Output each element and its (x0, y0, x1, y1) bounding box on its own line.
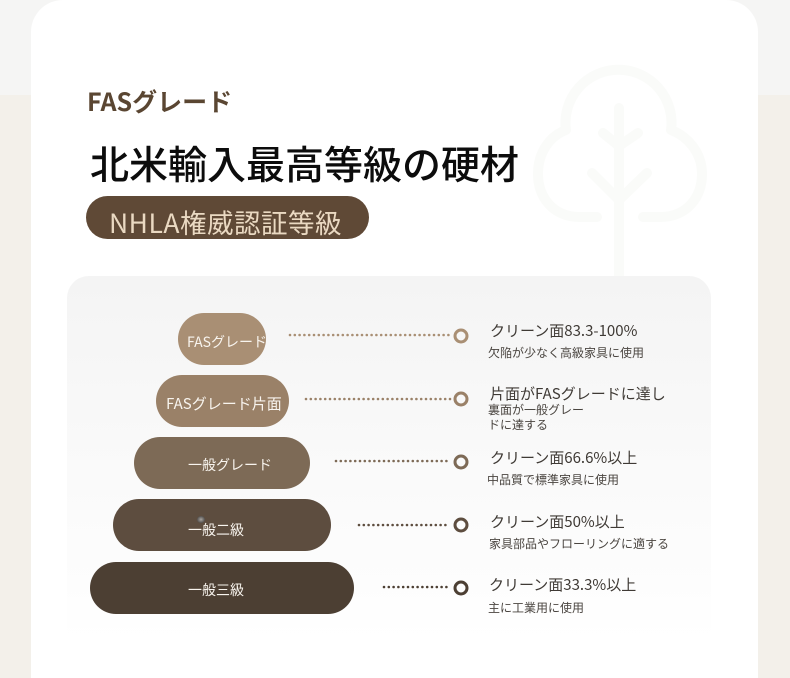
text: common grade 3 description: 主に工業用に使用 (488, 599, 584, 616)
badge text: NHLA権威認証等級 (109, 202, 342, 241)
text: FAS description: クリーン面83.3-100% (490, 320, 637, 341)
connector 2 (306, 393, 467, 405)
text: 欠陥が少なく高級家具に使用 (488, 344, 644, 361)
pill: common grade 3 (90, 562, 354, 614)
small artifact on pill (197, 516, 205, 523)
text: common grade description: クリーン面66.6%以上 (490, 447, 637, 468)
pill: common grade (134, 437, 310, 489)
pill label: 一般グレード (188, 455, 272, 475)
pill label: FASグレード (187, 332, 267, 352)
text: common grade 2 description: 家具部品やフローリングに適する (489, 535, 669, 552)
pill label: 一般三級 (188, 580, 244, 600)
text: one-face description (488, 383, 666, 433)
panel: grade pyramid (67, 276, 711, 640)
connector 3 (336, 456, 467, 468)
background: top band (0, 0, 790, 95)
connector 4 (359, 519, 467, 531)
heading: FAS grade: FASグレード (87, 83, 232, 119)
pill label: FASグレード片面 (166, 393, 282, 414)
pill: FAS grade (178, 313, 266, 365)
text: common grade description (487, 447, 637, 488)
text: common grade description: 中品質で標準家具に使用 (487, 471, 619, 488)
pill label: 一般二級 (188, 520, 244, 540)
text: common grade 3 description: クリーン面33.3%以上 (489, 574, 636, 595)
pill: common grade 2 (113, 499, 331, 551)
connector 5 (384, 582, 467, 594)
pill: FAS one face (156, 375, 289, 427)
text: one-face description: 裏面が一般グレー (488, 401, 584, 418)
title: 北米輸入最高等級の硬材 (90, 135, 519, 191)
badge: NHLA certified (86, 196, 369, 239)
text: FAS description (488, 320, 644, 361)
connector 1 (290, 330, 467, 342)
text: one-face description: 片面がFASグレードに達し (490, 383, 666, 404)
text: common grade 2 description: クリーン面50%以上 (490, 511, 625, 532)
text: one-face description: ドに達する (488, 416, 548, 433)
icon: faint tree watermark (520, 60, 720, 280)
